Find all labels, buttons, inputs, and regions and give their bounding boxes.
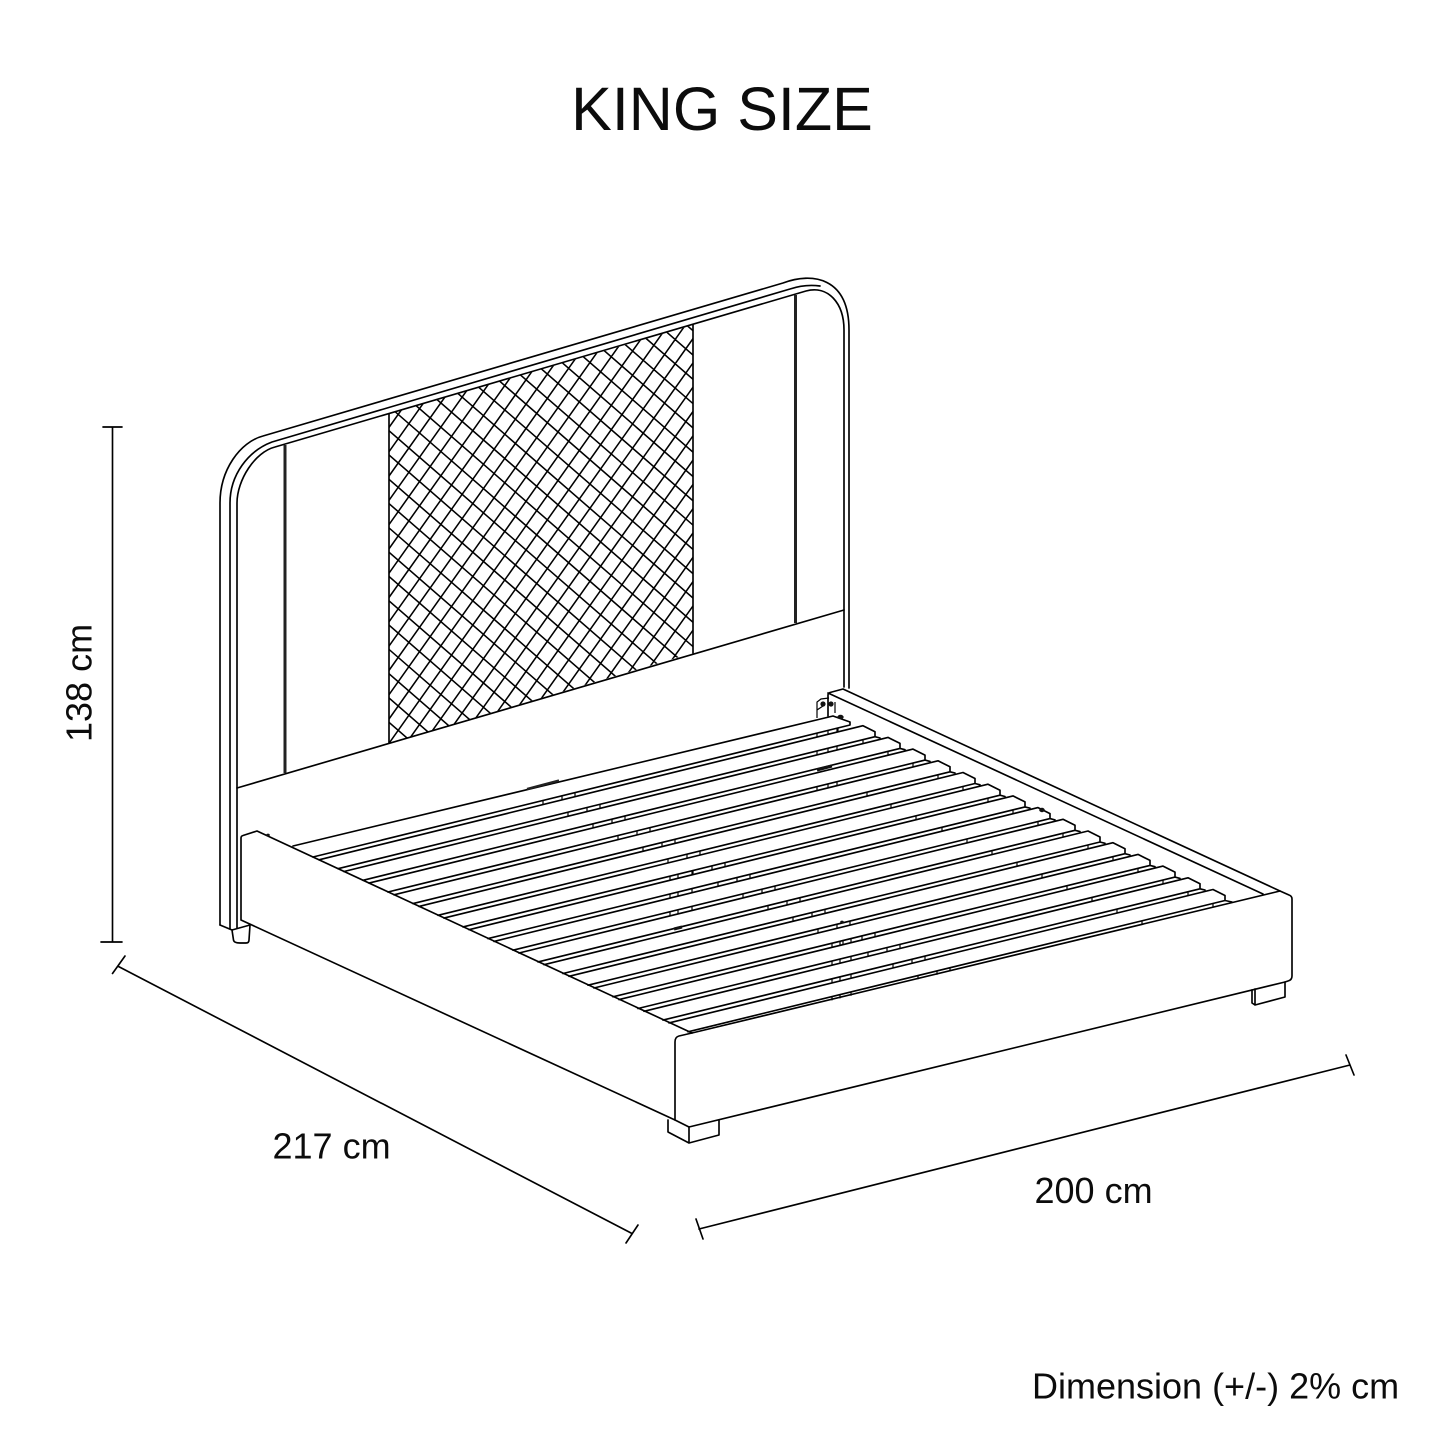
bed base frame: [241, 689, 1292, 1127]
slat 7: [469, 796, 1030, 939]
slat 2: [344, 737, 905, 880]
left side rail: [241, 831, 692, 1120]
height label: 138 cm: [58, 624, 100, 742]
slat 1: [319, 726, 880, 869]
small hardware details: [266, 780, 1045, 923]
front leg: [668, 1120, 719, 1143]
slat 15: [669, 890, 1232, 1032]
title: KING SIZE: [571, 75, 873, 143]
tolerance note: Dimension (+/-) 2% cm: [1032, 1366, 1399, 1406]
slat 5: [419, 772, 980, 915]
back slat: [293, 716, 850, 857]
slat 8: [494, 808, 1055, 950]
headboard bottom panel edge: [237, 610, 844, 788]
headboard inner frame: [237, 290, 844, 928]
slat 11: [569, 843, 1130, 985]
height dimension line: [101, 427, 122, 942]
width label: 200 cm: [1034, 1170, 1153, 1211]
left headboard leg: [220, 925, 250, 943]
length dimension line: [112, 956, 638, 1243]
headboard vertical grooves: [285, 295, 796, 773]
quilted diamond panel: [388, 324, 694, 743]
headboard outer frame: [220, 278, 849, 925]
slat 14: [644, 878, 1205, 1020]
headboard: [219, 277, 850, 930]
slat 12: [594, 854, 1155, 997]
slat 9: [519, 819, 1080, 962]
slat support ticks: [543, 728, 1213, 1000]
front face of base: [675, 891, 1292, 1127]
width dimension line: [696, 1055, 1354, 1239]
slat 4: [394, 761, 955, 904]
slat 10: [544, 831, 1105, 974]
slat 13: [619, 866, 1180, 1008]
headboard middle piping: [230, 285, 820, 929]
right side rail: [828, 689, 1280, 894]
slat hardware marks: [674, 766, 832, 929]
slat 6: [444, 784, 1005, 927]
slat 3: [369, 749, 930, 892]
length label: 217 cm: [272, 1126, 391, 1166]
bed slats: [293, 716, 1232, 1032]
right rear leg: [1252, 982, 1285, 1005]
corner bracket and bolts: [817, 698, 844, 719]
